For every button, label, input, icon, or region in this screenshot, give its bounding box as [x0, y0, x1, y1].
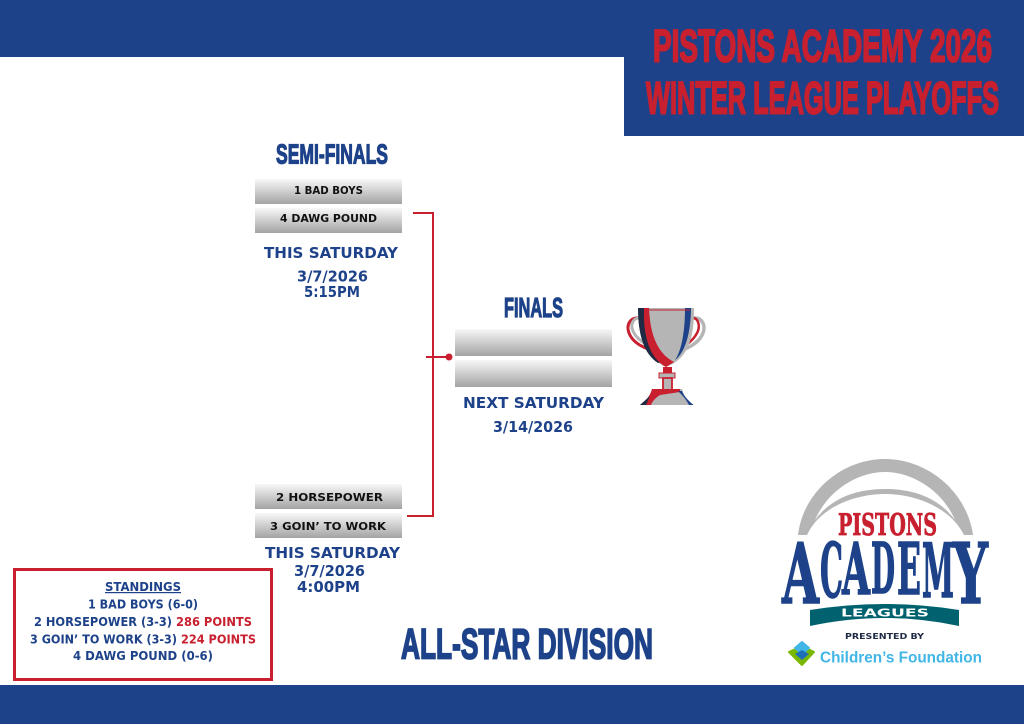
title panel [624, 0, 1024, 136]
panel: standings: 4 DAWG POUND (0-6) [73, 649, 213, 663]
logo wordmark: Academy: E [897, 527, 921, 611]
game info: semi-final two [265, 544, 401, 596]
logo banner: Leagues: LEAGUES [841, 606, 929, 620]
panel: standings [14, 570, 272, 680]
game info: semi-final two: 3/7/2026 [294, 562, 365, 580]
team bar: 1 Bad Boys [255, 179, 402, 204]
bottom footer band [0, 685, 1024, 724]
panel: standings: STANDINGS [105, 580, 181, 594]
game info: semi-final one [264, 244, 399, 301]
panel: standings: 224 POINTS [181, 632, 256, 646]
final bar: bottom [455, 360, 612, 387]
game info: final: NEXT SATURDAY [463, 394, 605, 412]
top header band [0, 0, 1024, 57]
team bar: 1 Bad Boys: 1 BAD BOYS [294, 185, 363, 197]
final bar: top [455, 329, 612, 356]
logo wordmark: Academy: M [922, 527, 954, 615]
game info: semi-final one: THIS SATURDAY [264, 244, 399, 262]
heading: semi-finals: SEMI-FINALS [276, 138, 388, 170]
team bar: 2 Horsepower [255, 484, 402, 509]
logo banner: Leagues [810, 604, 959, 626]
icon: trophy [628, 308, 704, 405]
game info: final: 3/14/2026 [493, 418, 573, 436]
bracket connector [407, 213, 452, 516]
logo text: Children's Foundation: Children’s Foundation [820, 650, 982, 666]
game info: semi-final two: THIS SATURDAY [265, 544, 401, 562]
logo wordmark: Academy [781, 525, 989, 623]
team bar: 3 Goin' to Work [255, 513, 402, 538]
game info: final [463, 394, 605, 436]
team bar: 3 Goin' to Work: 3 GOIN’ TO WORK [270, 521, 387, 533]
logo wordmark: Pistons: PISTONS [838, 508, 937, 543]
panel: standings: 1 BAD BOYS (6-0) [88, 598, 198, 612]
game info: semi-final one: 5:15PM [304, 283, 360, 301]
panel: standings: 2 HORSEPOWER (3-3) [34, 615, 172, 629]
game info: semi-final two: 4:00PM [297, 578, 360, 596]
panel: standings: 3 GOIN’ TO WORK (3-3) [30, 632, 177, 646]
logo: Pistons Academy Leagues [781, 459, 989, 666]
logo wordmark: Academy: D [871, 527, 895, 610]
logo wordmark: Academy: A [781, 525, 820, 623]
logo arch [798, 459, 973, 535]
logo icon: Children's Foundation [789, 642, 814, 665]
heading: finals: FINALS [504, 292, 563, 323]
logo wordmark: Academy: Y [952, 525, 989, 623]
team bar: 2 Horsepower: 2 HORSEPOWER [276, 492, 383, 504]
team bar: 4 Dawg Pound [255, 208, 402, 233]
game info: semi-final one: 3/7/2026 [297, 268, 368, 286]
panel: standings: 286 POINTS [176, 615, 252, 629]
logo text: presented by: PRESENTED BY [845, 632, 924, 641]
logo wordmark: Academy: A [841, 527, 870, 611]
team bar: 4 Dawg Pound: 4 DAWG POUND [280, 213, 377, 225]
logo wordmark: Academy: C [820, 527, 843, 615]
heading: all-star division: ALL-STAR DIVISION [401, 622, 653, 668]
